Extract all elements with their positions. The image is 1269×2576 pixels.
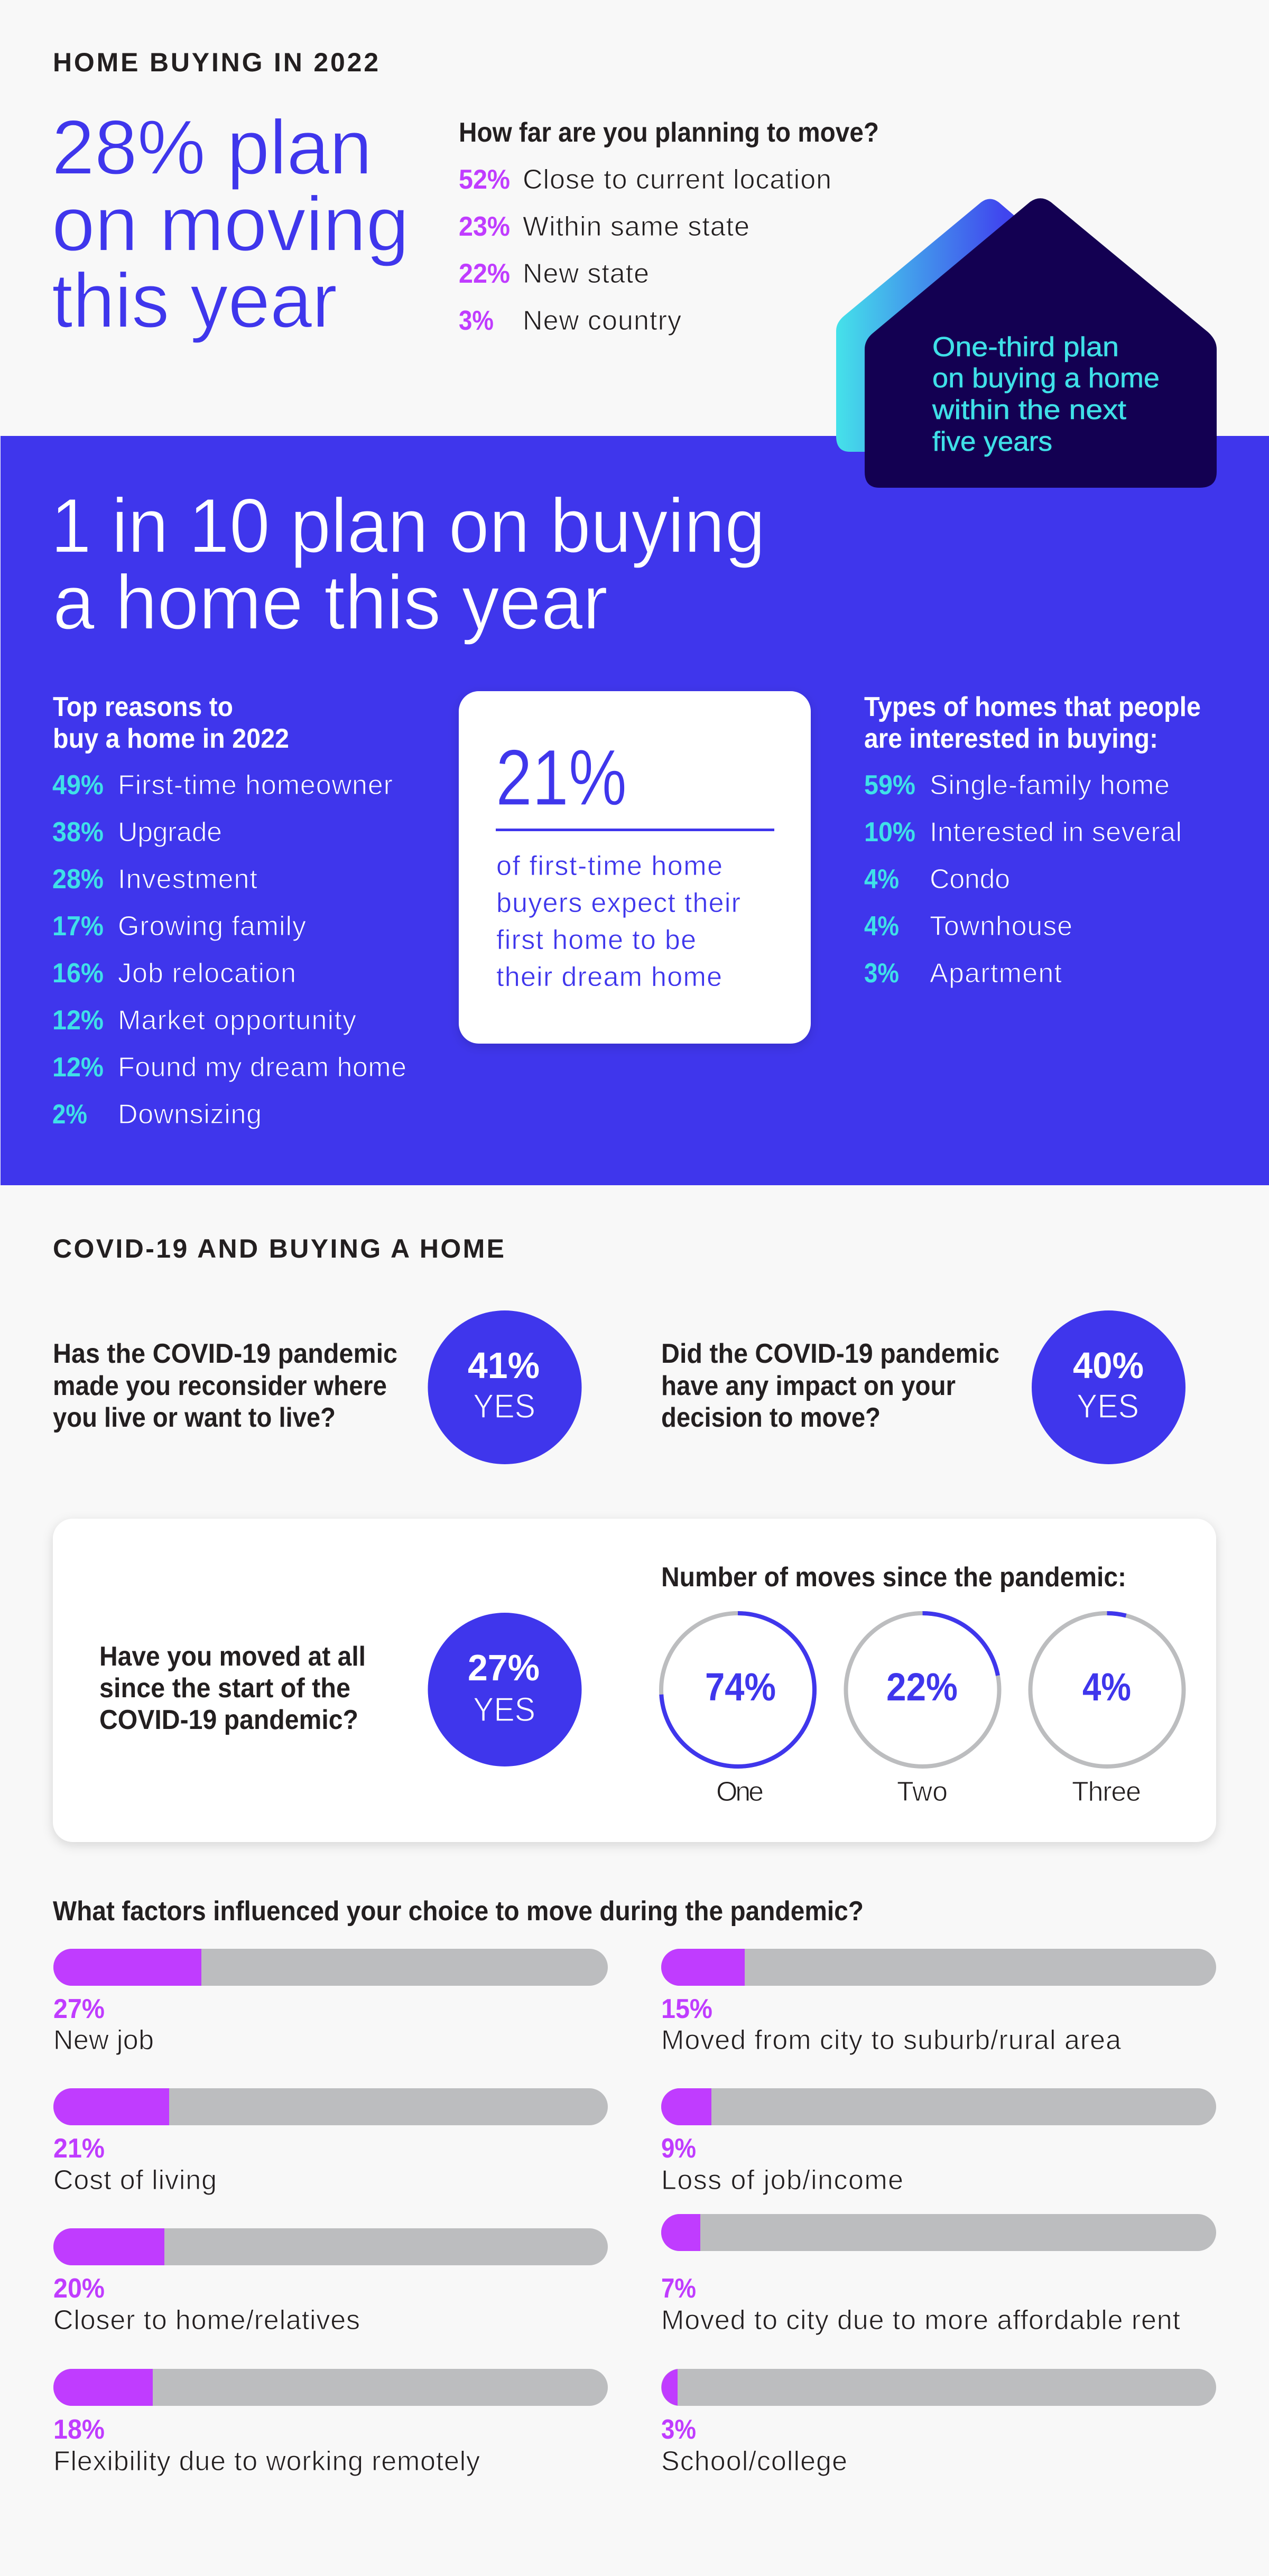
card text <box>496 851 740 992</box>
row: investment: Investment <box>118 864 258 895</box>
row: condo <box>864 864 1010 895</box>
stat circle: 27% yes <box>428 1613 581 1766</box>
row: new country: New country <box>523 305 681 336</box>
row: investment: 28% <box>52 864 104 895</box>
question: have you moved: Have you moved at all <box>99 1641 366 1672</box>
title: 1 in 10 plan on buying a home this year: 1 in 10 plan on buying <box>51 482 765 569</box>
bar: 9% loss of job <box>661 2088 1216 2196</box>
callout text <box>932 332 1160 457</box>
row: market opportunity: Market opportunity <box>118 1005 356 1036</box>
list: types of homes <box>864 692 1201 989</box>
question: impact on decision to move: Did the COVID-19 pandemic <box>661 1338 999 1369</box>
row: first-time homeowner: 49% <box>52 770 104 801</box>
bar: 7% affordable rent: Moved to city due to more affordable rent <box>661 2305 1181 2336</box>
row: new state <box>459 258 649 289</box>
callout text: on buying a home <box>932 363 1160 394</box>
row: single-family home: Single-family home <box>930 770 1170 801</box>
bar: 18% flexibility <box>53 2369 608 2477</box>
question: impact on decision to move: decision to move? <box>661 1402 881 1433</box>
bar: 18% flexibility: Flexibility due to working remotely <box>53 2446 480 2477</box>
bar: 21% cost of living <box>53 2088 608 2196</box>
row: upgrade <box>52 817 222 848</box>
stat circle: 41% yes: YES <box>473 1387 535 1425</box>
question: have you moved: COVID-19 pandemic? <box>99 1705 358 1735</box>
list heading <box>53 692 289 754</box>
ring chart: 4% three: 4% <box>1082 1665 1131 1709</box>
row: found my dream home: Found my dream home <box>118 1052 406 1083</box>
heading: what factors influenced your choice: What factors influenced your choice to move during the pandemic? <box>53 1896 864 1927</box>
row: new state: 22% <box>459 258 510 289</box>
bar: 27% new job: 27% <box>53 1994 105 2024</box>
row: new state: New state <box>523 258 649 289</box>
list heading: Top reasons to <box>53 692 233 722</box>
list: how far are you planning to move <box>459 117 879 336</box>
card: 21% first-time home buyers <box>459 691 811 1044</box>
icon: house callout <box>836 198 1217 488</box>
row: townhouse: Townhouse <box>930 911 1072 942</box>
bar: 15% city to suburb <box>661 1949 1216 2056</box>
row: job relocation: Job relocation <box>118 958 296 989</box>
heading: number of moves: Number of moves since the pandemic: <box>661 1562 1126 1593</box>
question: impact on decision to move: have any impact on your <box>661 1371 956 1401</box>
ring chart: 22% two <box>846 1613 999 1807</box>
question: have you moved: since the start of the <box>99 1673 350 1704</box>
front house shape <box>865 198 1217 488</box>
bar: 3% school: 3% <box>661 2414 696 2445</box>
row: apartment: Apartment <box>930 958 1062 989</box>
row: new country: 3% <box>459 305 494 336</box>
stat circle: 27% yes: 27% <box>468 1647 540 1688</box>
row: within same state: 23% <box>459 211 510 242</box>
row: apartment: 3% <box>864 958 899 989</box>
list heading: Types of homes that people <box>864 692 1201 722</box>
bar: 15% city to suburb: Moved from city to suburb/rural area <box>661 2025 1121 2056</box>
row: within same state: Within same state <box>523 211 749 242</box>
card text: first home to be <box>496 925 696 955</box>
callout text: within the next <box>932 395 1127 425</box>
ring chart: 74% one <box>661 1613 814 1807</box>
question: reconsider where you live: Has the COVID-19 pandemic <box>53 1338 397 1369</box>
question: reconsider where you live: you live or want to live? <box>53 1402 336 1433</box>
bar chart: factors <box>53 1949 1216 2477</box>
bar: 21% cost of living: Cost of living <box>53 2165 217 2196</box>
bar: 7% affordable rent: 7% <box>661 2273 696 2304</box>
bar: 3% school: School/college <box>661 2446 847 2477</box>
card text: of first-time home <box>496 851 723 881</box>
stat circle: 40% yes: 40% <box>1073 1345 1144 1386</box>
list heading: are interested in buying: <box>864 723 1158 754</box>
stat circle: 40% yes: YES <box>1077 1387 1139 1425</box>
question: have you moved <box>99 1641 366 1735</box>
bar: 18% flexibility: 18% <box>53 2414 105 2445</box>
list heading: buy a home in 2022 <box>53 723 289 754</box>
row: downsizing: Downsizing <box>118 1099 262 1130</box>
row: townhouse <box>864 911 1072 942</box>
panel: moves since the pandemic <box>53 1519 1216 1842</box>
card text: their dream home <box>496 962 722 992</box>
row: close to current location: Close to current location <box>523 164 831 195</box>
row: investment <box>52 864 258 895</box>
stat circle: 40% yes <box>1032 1310 1185 1464</box>
bar: 27% new job <box>53 1949 608 2056</box>
ring chart: 4% three: Three <box>1072 1777 1141 1807</box>
stat circle: 41% yes <box>428 1310 581 1464</box>
question: impact on decision to move <box>661 1338 999 1433</box>
row: found my dream home: 12% <box>52 1052 104 1083</box>
row: downsizing <box>52 1099 262 1130</box>
question: reconsider where you live <box>53 1338 397 1433</box>
row: job relocation: 16% <box>52 958 104 989</box>
stat circle: 27% yes: YES <box>473 1690 535 1728</box>
row: downsizing: 2% <box>52 1099 87 1130</box>
ring chart: 74% one: One <box>716 1777 764 1807</box>
row: townhouse: 4% <box>864 911 899 942</box>
bar: 7% affordable rent <box>661 2214 1216 2336</box>
bar: 21% cost of living: 21% <box>53 2133 105 2164</box>
row: growing family: 17% <box>52 911 104 942</box>
bar: 9% loss of job: 9% <box>661 2133 696 2164</box>
heading: covid-19 and buying a home: COVID-19 AND BUYING A HOME <box>53 1234 504 1263</box>
row: condo: 4% <box>864 864 899 895</box>
bar: 3% school <box>661 2369 1216 2477</box>
bar: 20% closer to home: Closer to home/relatives <box>53 2305 360 2336</box>
title: 1 in 10 plan on buying a home this year: a home this year <box>53 559 608 645</box>
question: reconsider where you live: made you reconsider where <box>53 1371 387 1401</box>
row: condo: Condo <box>930 864 1010 895</box>
list heading <box>864 692 1201 754</box>
panel: blue band <box>1 436 1269 1185</box>
bar: 9% loss of job: Loss of job/income <box>661 2165 903 2196</box>
title: 28% plan on moving this year <box>52 104 409 343</box>
ring chart: 22% two: 22% <box>886 1665 958 1709</box>
list: top reasons to buy a home <box>52 692 406 1130</box>
row: interested in several: 10% <box>864 817 915 848</box>
heading: home buying in 2022: HOME BUYING IN 2022 <box>53 48 378 77</box>
card text: buyers expect their <box>496 888 740 918</box>
title: 28% plan on moving this year: on moving <box>52 181 409 267</box>
callout text: five years <box>932 426 1052 457</box>
bar: 27% new job: New job <box>53 2025 154 2056</box>
row: close to current location: 52% <box>459 164 510 195</box>
row: upgrade: Upgrade <box>118 817 222 848</box>
row: first-time homeowner: First-time homeowner <box>118 770 393 801</box>
stat: 21%: 21% <box>496 733 627 822</box>
row: interested in several: Interested in several <box>930 817 1182 848</box>
title: 28% plan on moving this year: this year <box>52 257 337 343</box>
title: 28% plan on moving this year: 28% plan <box>52 104 372 190</box>
stat circle: 41% yes: 41% <box>468 1345 540 1386</box>
bar: 20% closer to home: 20% <box>53 2273 105 2304</box>
row: growing family: Growing family <box>118 911 306 942</box>
ring chart: 22% two: Two <box>897 1777 948 1807</box>
row: apartment <box>864 958 1062 989</box>
callout text: One-third plan <box>932 332 1119 362</box>
bar: 20% closer to home <box>53 2228 608 2336</box>
row: upgrade: 38% <box>52 817 104 848</box>
card background <box>53 1519 1216 1842</box>
row: market opportunity: 12% <box>52 1005 104 1036</box>
ring chart: 74% one: 74% <box>705 1665 776 1709</box>
ring chart: 4% three <box>1031 1613 1184 1807</box>
card background <box>459 691 811 1044</box>
bar: 15% city to suburb: 15% <box>661 1994 712 2024</box>
title: 1 in 10 plan on buying a home this year <box>51 482 765 645</box>
row: single-family home: 59% <box>864 770 915 801</box>
list heading: How far are you planning to move? <box>459 117 879 148</box>
back house shape <box>836 199 1083 452</box>
